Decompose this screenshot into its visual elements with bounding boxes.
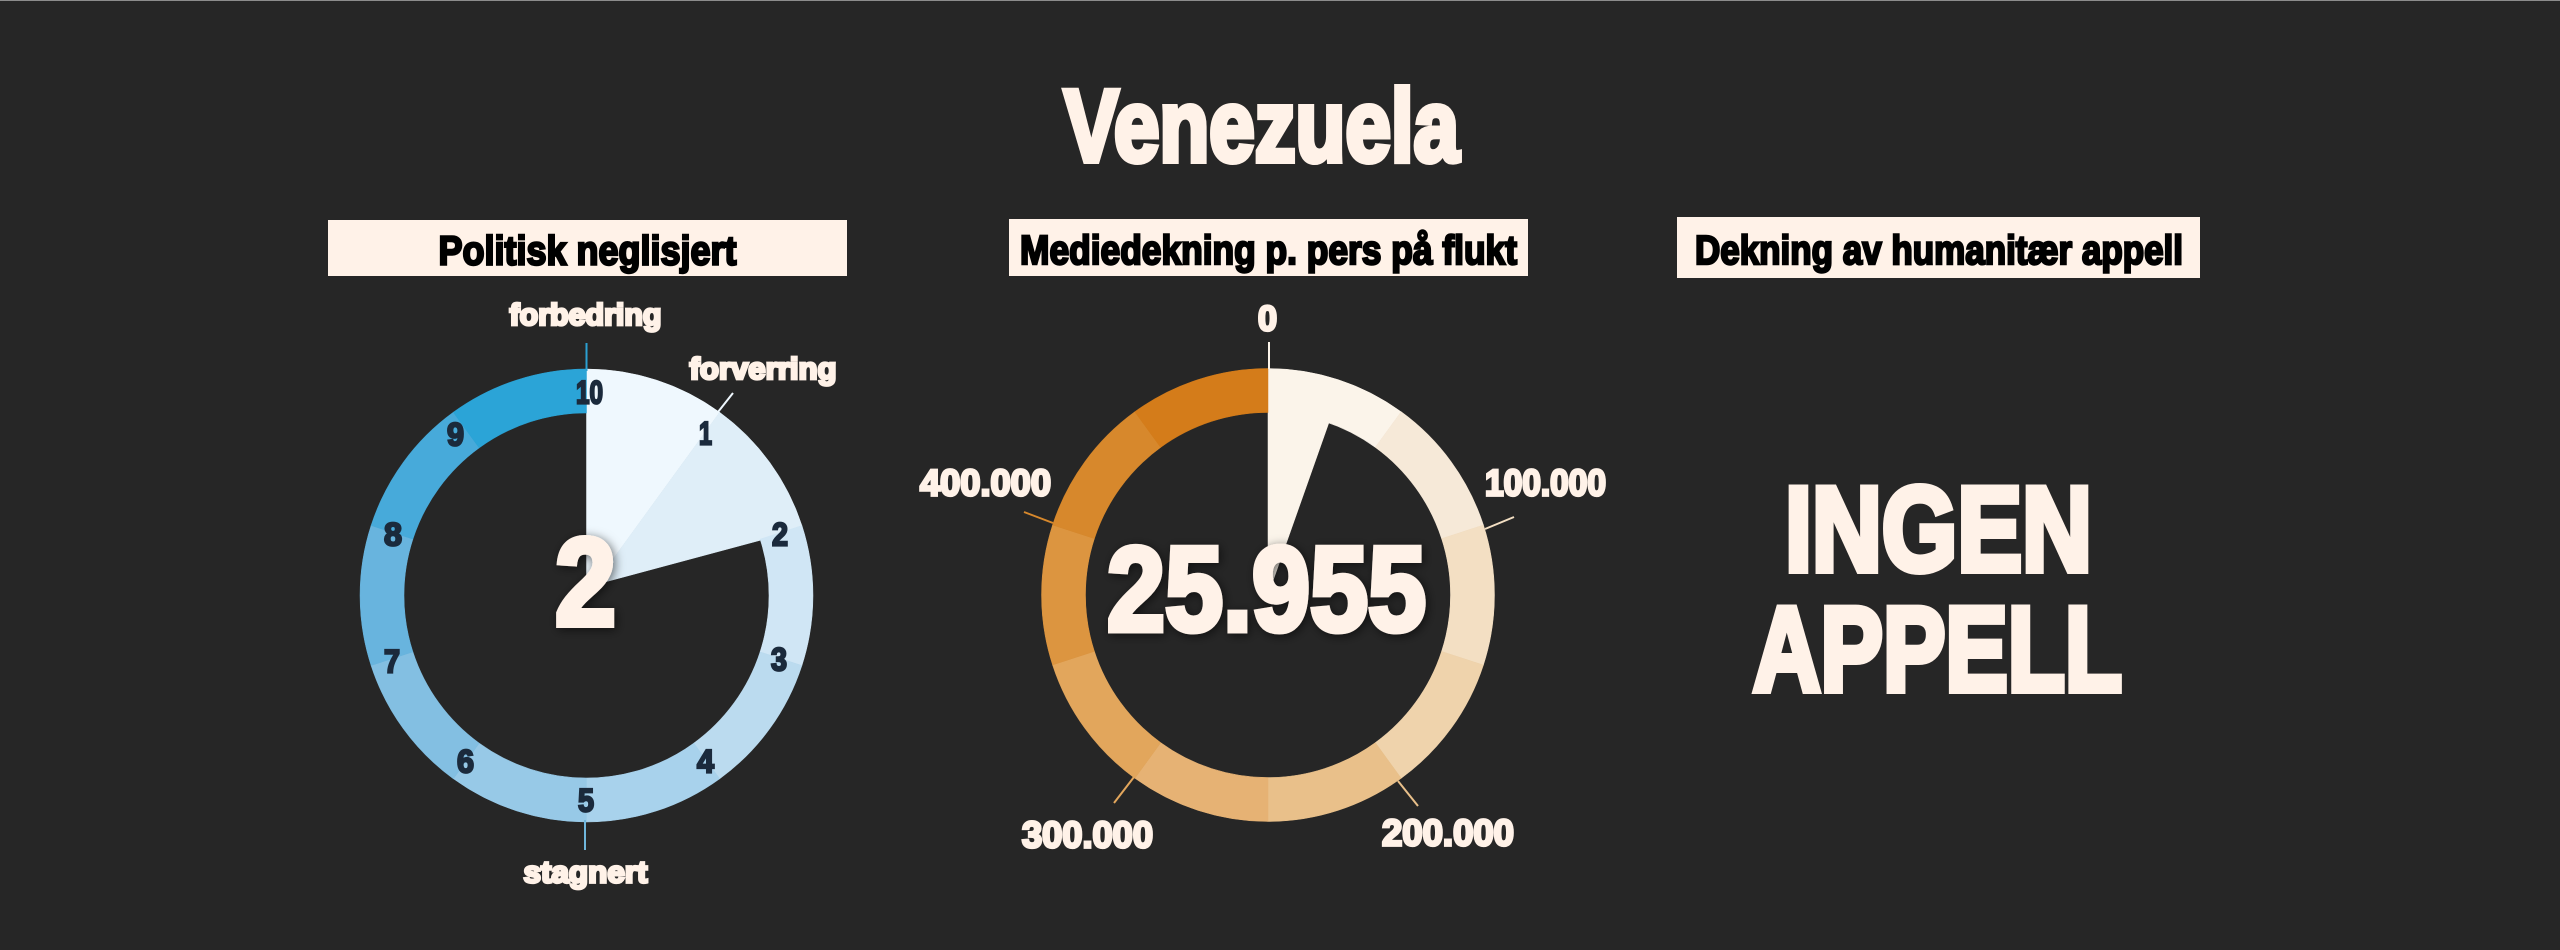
label: 200.000: 200.000 bbox=[1382, 812, 1514, 854]
tick: 0 bbox=[1268, 342, 1270, 369]
tick: forbedring bbox=[586, 343, 588, 371]
heading: Mediedekning p. pers på flukt: Mediedekning p. pers på flukt bbox=[1020, 227, 1517, 273]
scale numbers: 2 bbox=[772, 516, 788, 552]
label: 300.000: 300.000 bbox=[1022, 814, 1153, 856]
label: stagnert: stagnert bbox=[524, 854, 648, 890]
scale numbers: 1 bbox=[699, 416, 712, 452]
value: 2: 2 bbox=[555, 514, 616, 652]
scale numbers: 3 bbox=[771, 642, 787, 678]
tick: 200.000 bbox=[1398, 781, 1418, 806]
title: Venezuela bbox=[1064, 69, 1460, 183]
heading: Dekning av humanitær appell: Dekning av humanitær appell bbox=[1695, 227, 2183, 273]
scale numbers bbox=[384, 374, 788, 818]
panel: media coverage bbox=[920, 219, 1606, 856]
big text: INGEN APPELL: APPELL bbox=[1753, 582, 2122, 716]
panel: political neglect bbox=[328, 220, 847, 890]
label: forverring: forverring bbox=[690, 351, 836, 386]
heading: Politisk neglisjert: Politisk neglisjert bbox=[438, 228, 737, 274]
heading: Dekning av humanitær appell bbox=[1677, 217, 2200, 278]
tick: 300.000 bbox=[1114, 777, 1134, 803]
panel: humanitarian appeal bbox=[1677, 217, 2200, 716]
big text: INGEN APPELL: INGEN bbox=[1785, 462, 2092, 596]
gauge: score ring bbox=[330, 334, 843, 857]
scale numbers: 9 bbox=[447, 416, 464, 452]
scale numbers: 10 bbox=[576, 374, 603, 410]
scale numbers: 5 bbox=[578, 782, 594, 818]
label: 100.000: 100.000 bbox=[1485, 462, 1606, 504]
tick: 400.000 bbox=[1024, 512, 1053, 523]
label: forbedring: forbedring bbox=[510, 297, 662, 332]
tick: stagnert bbox=[584, 820, 586, 850]
heading: Politisk neglisjert bbox=[328, 220, 847, 276]
scale numbers: 8 bbox=[384, 516, 402, 552]
tick: forverring bbox=[718, 393, 733, 412]
label: 400.000: 400.000 bbox=[920, 462, 1051, 504]
scale numbers: 6 bbox=[457, 744, 474, 780]
big text: INGEN APPELL bbox=[1753, 462, 2122, 716]
tick: 100.000 bbox=[1485, 517, 1514, 529]
value: 25.955: 25.955 bbox=[1107, 522, 1426, 656]
scale numbers: 7 bbox=[384, 644, 400, 680]
scale numbers: 4 bbox=[697, 744, 714, 780]
label: 0: 0 bbox=[1258, 300, 1277, 338]
gauge: coverage ring bbox=[1011, 334, 1525, 856]
